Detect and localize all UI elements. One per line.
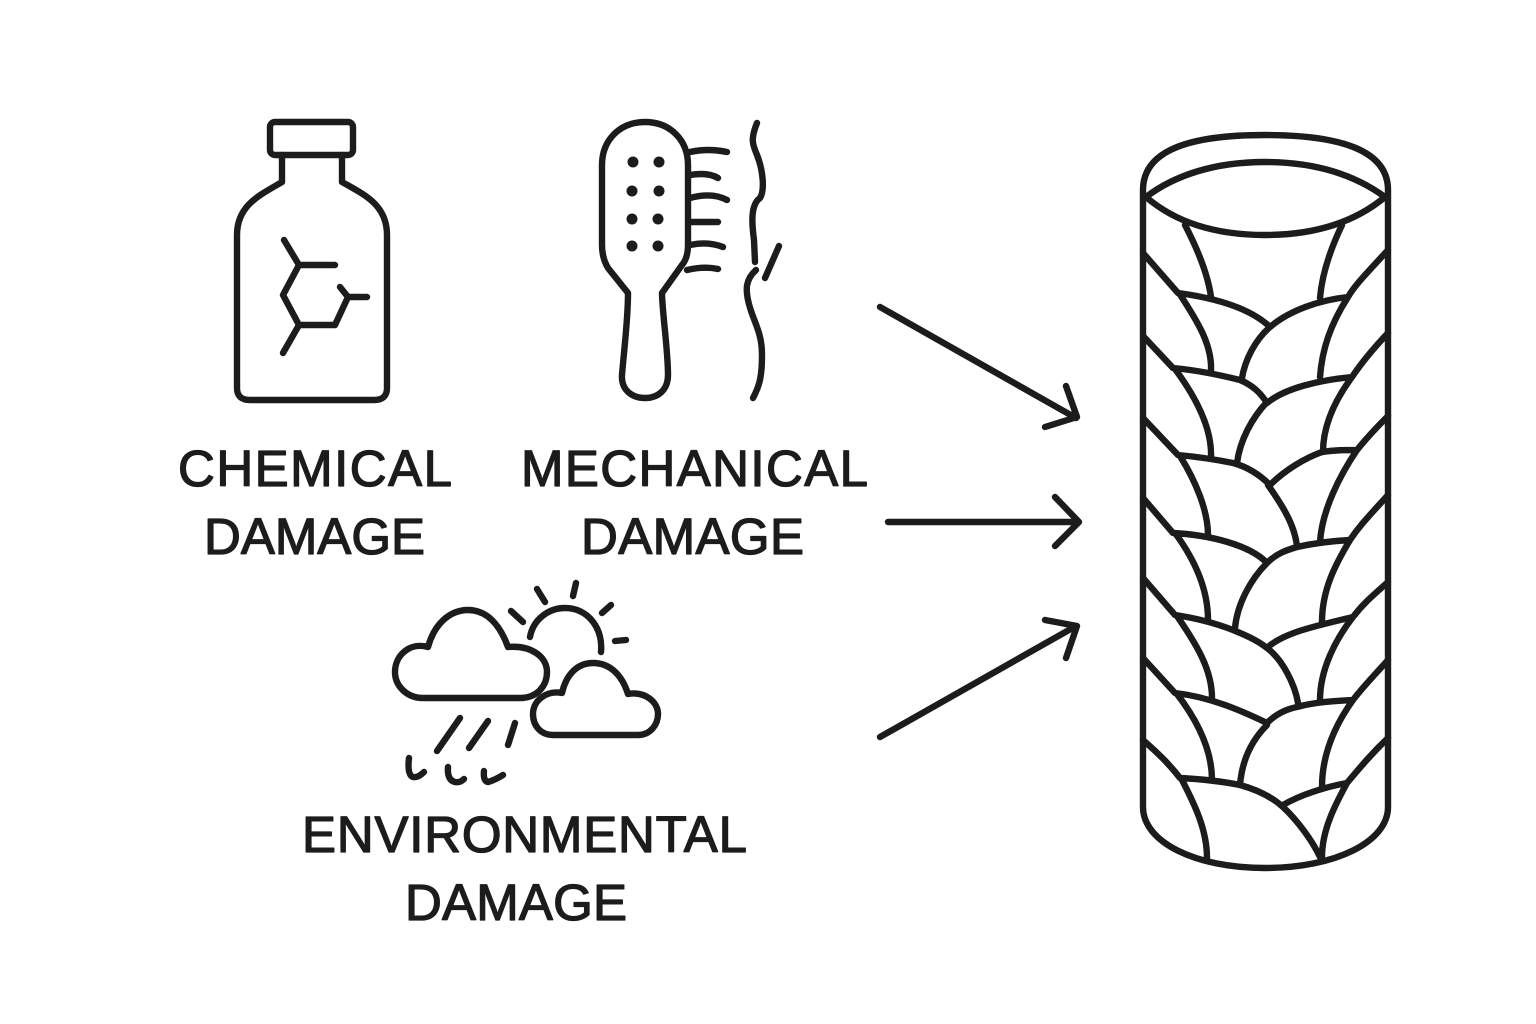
icon: hairbrush and broken hair: [602, 122, 779, 398]
hair shaft cylinder with lifted cuticle scales: [1143, 135, 1388, 868]
arrow: environmental to hair: [880, 620, 1077, 737]
icon: weather with clouds, sun and rain: [395, 583, 658, 782]
top opening: [1146, 162, 1385, 235]
heading: mechanical damage: DAMAGE: [581, 508, 804, 565]
heading: chemical damage: [178, 440, 452, 565]
heading: mechanical damage: MECHANICAL: [521, 440, 868, 497]
arrow: mechanical to hair: [888, 497, 1079, 546]
cylinder outline: [1143, 135, 1388, 868]
icon: chemical bottle: [237, 122, 387, 400]
heading: chemical damage: DAMAGE: [204, 508, 425, 565]
cuticle scales: [1143, 225, 1388, 858]
heading: environmental damage: DAMAGE: [405, 874, 627, 931]
heading: environmental damage: [302, 806, 747, 931]
heading: environmental damage: ENVIRONMENTAL: [302, 806, 747, 863]
heading: chemical damage: CHEMICAL: [178, 440, 452, 497]
heading: mechanical damage: [521, 440, 868, 565]
arrow: chemical to hair: [880, 307, 1077, 427]
